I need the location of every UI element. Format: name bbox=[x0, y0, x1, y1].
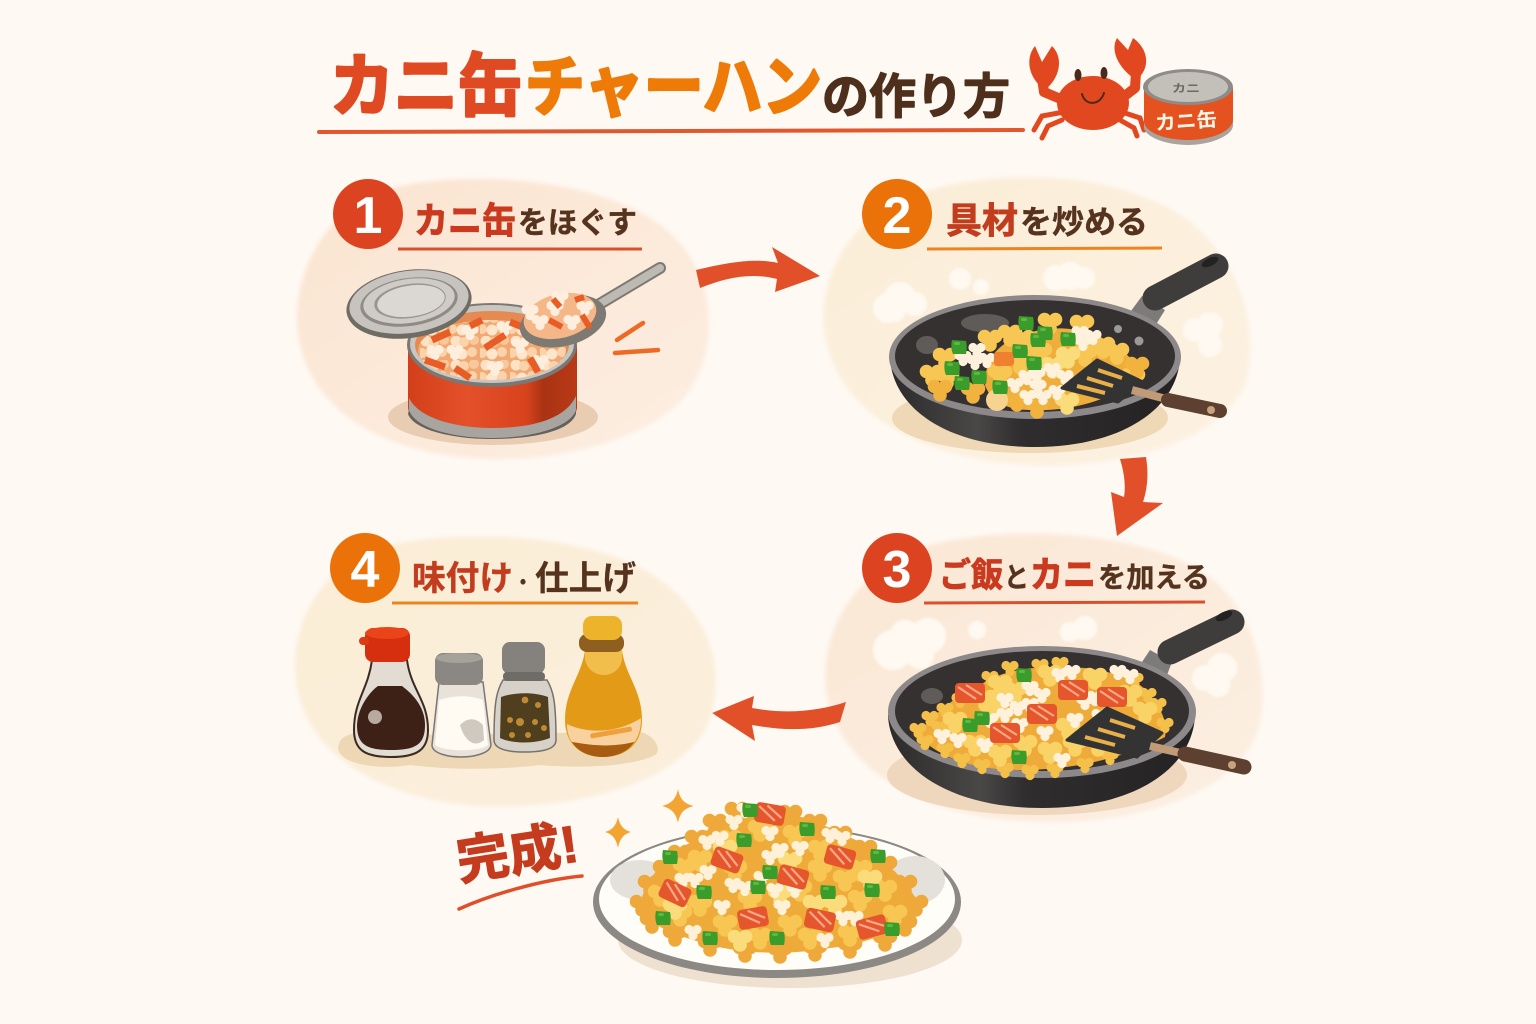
title: カニ缶 bbox=[330, 49, 522, 125]
icon: crab can: カニ bbox=[1172, 82, 1200, 95]
icon: crab can: カニ缶 bbox=[1154, 107, 1218, 135]
arrow: step 2 to 3 bbox=[1111, 457, 1163, 536]
title: チャーハン bbox=[525, 50, 822, 124]
icon: salt shaker bbox=[432, 653, 491, 757]
panel: step 3 bbox=[825, 533, 1263, 822]
step heading 3: を加える bbox=[1098, 562, 1210, 593]
arrow: step 3 to 4 bbox=[712, 696, 846, 741]
icon: soy sauce bottle bbox=[354, 627, 428, 757]
step number 3: 3 bbox=[883, 541, 911, 599]
step heading 4: 味付け bbox=[412, 560, 513, 598]
step heading 2: を炒める bbox=[1020, 204, 1148, 240]
step heading 3 bbox=[939, 554, 1210, 595]
panel: step 2 bbox=[824, 177, 1251, 466]
step heading 4: ・ bbox=[513, 570, 533, 595]
icon: steam bbox=[873, 616, 1237, 697]
step heading 3: ご飯 bbox=[939, 557, 1003, 595]
panel background bbox=[297, 179, 709, 459]
step heading 3: と bbox=[1004, 562, 1029, 593]
icon: pepper shaker bbox=[494, 642, 556, 752]
step heading 4: 仕上げ bbox=[535, 560, 636, 598]
icon: can lid bbox=[342, 262, 476, 346]
step number 2: 2 bbox=[883, 187, 911, 245]
panel background bbox=[825, 534, 1263, 822]
title underline bbox=[319, 130, 1023, 132]
step number 3 bbox=[862, 533, 932, 603]
step number 2 bbox=[862, 179, 932, 249]
icon: motion lines bbox=[615, 323, 658, 353]
icon: frying pan with rice and crab bbox=[887, 609, 1244, 815]
icon: crab can bbox=[1143, 69, 1233, 145]
title bbox=[330, 49, 1010, 125]
panel background bbox=[824, 177, 1251, 466]
step heading 2 bbox=[946, 200, 1148, 241]
step number 1 bbox=[333, 179, 403, 249]
step heading 1: カニ缶 bbox=[414, 200, 516, 241]
step number 1: 1 bbox=[354, 187, 382, 245]
step heading 4 bbox=[412, 560, 636, 598]
step number 4: 4 bbox=[351, 541, 380, 599]
arrow: step 1 to 2 bbox=[696, 247, 820, 292]
icon: sparkles bbox=[605, 789, 694, 848]
panel: step 4 bbox=[295, 533, 716, 806]
shadow under bottles bbox=[338, 732, 658, 769]
step heading 3: カニ bbox=[1030, 554, 1096, 595]
icon: spoon with crab bbox=[514, 268, 660, 356]
icon: frying pan with ingredients bbox=[889, 255, 1220, 453]
step heading 2: 具材 bbox=[946, 200, 1018, 241]
icon: steam bbox=[873, 262, 1223, 357]
icon: oil bottle bbox=[565, 616, 642, 757]
step number 4 bbox=[330, 533, 400, 603]
step heading 1 bbox=[414, 200, 637, 241]
step heading 1: をほぐす bbox=[518, 207, 637, 240]
panel: step 1 bbox=[297, 179, 709, 459]
icon: plate of crab fried rice bbox=[593, 802, 962, 988]
panel background bbox=[295, 537, 716, 806]
icon: open crab can bbox=[388, 303, 598, 445]
completed label: 完成! bbox=[453, 815, 582, 892]
icon: crab bbox=[1029, 38, 1146, 138]
title: の作り方 bbox=[822, 71, 1010, 124]
